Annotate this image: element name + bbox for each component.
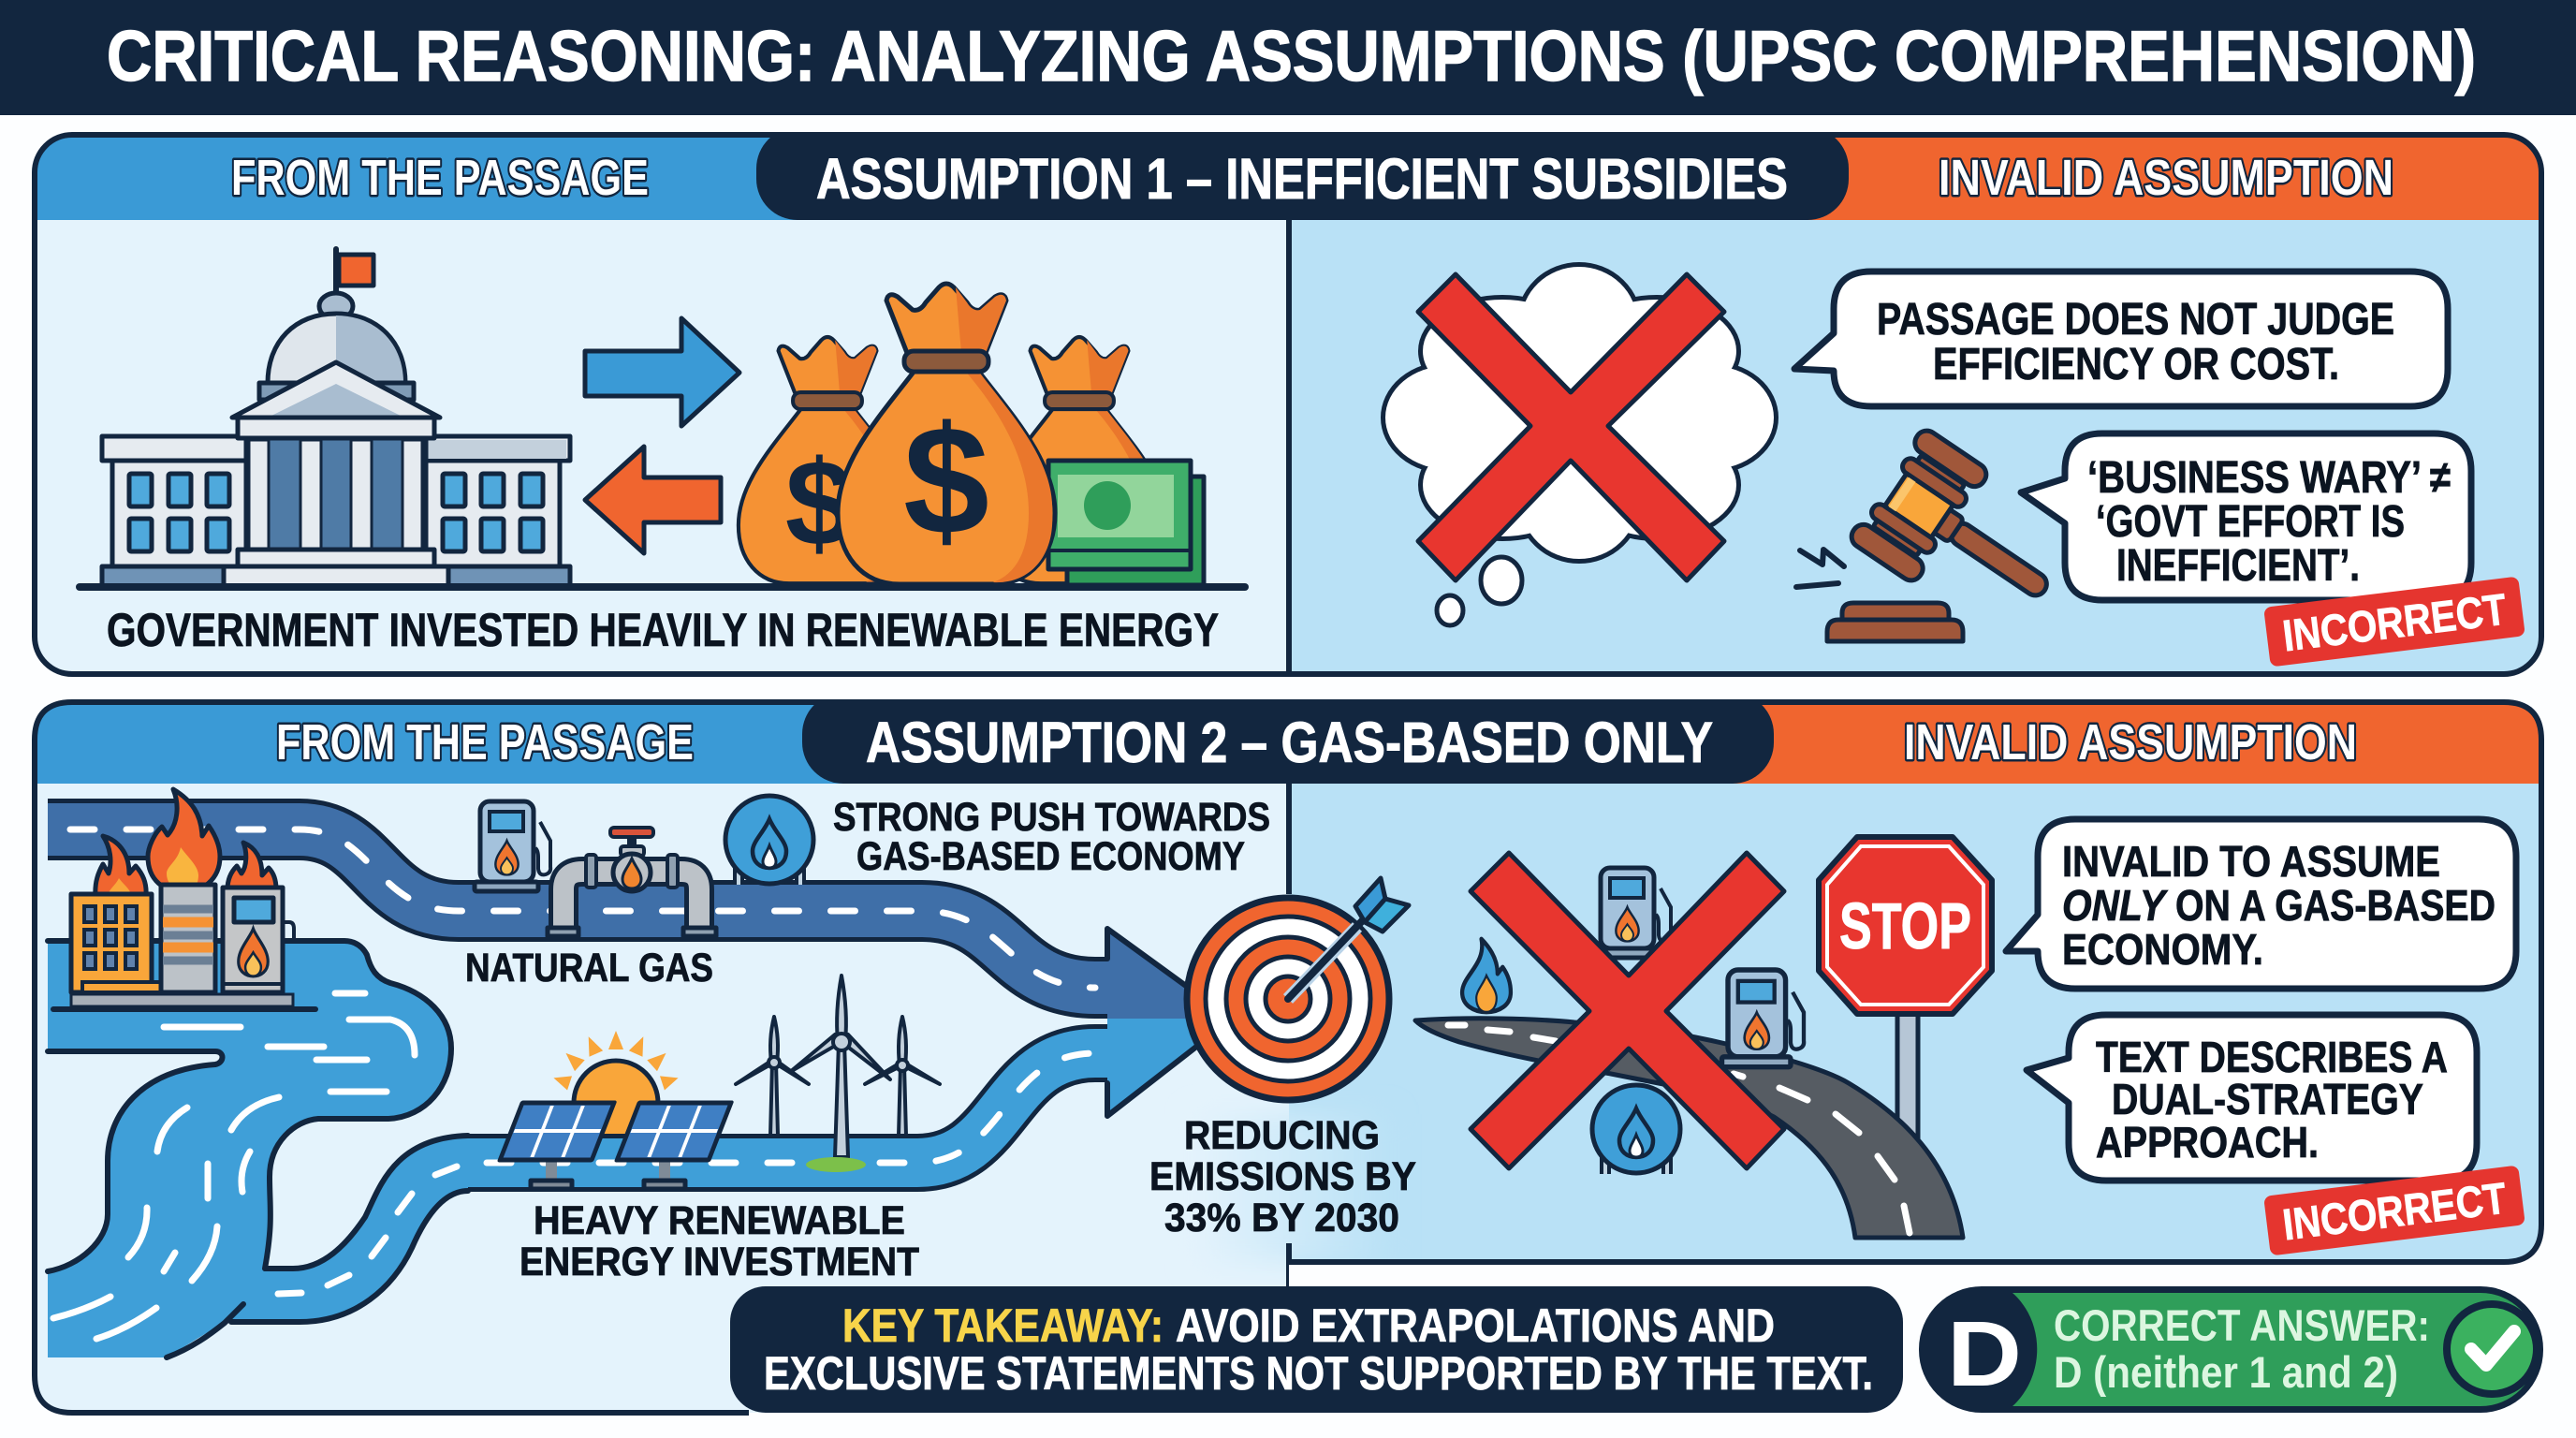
callout: dual strategy: TEXT DESCRIBES A — [2096, 1033, 2448, 1081]
icon: money bags and cash — [739, 284, 1204, 585]
label: heavy renewable: ENERGY INVESTMENT — [520, 1240, 919, 1284]
icon: gavel — [1796, 426, 2083, 647]
icon: stop sign post — [1897, 1011, 1918, 1152]
label: natural gas: NATURAL GAS — [465, 946, 713, 990]
label: reducing emissions: EMISSIONS BY — [1149, 1154, 1416, 1199]
callout: business wary — [2021, 433, 2471, 600]
road: natural gas route — [48, 829, 1119, 988]
icon: solar panels — [500, 1103, 731, 1189]
answer text: CORRECT ANSWER: — [2054, 1300, 2430, 1350]
heading: assumption 2: ASSUMPTION 2 – GAS-BASED ONLY — [866, 711, 1713, 774]
icon: money bags and cash: $ — [903, 394, 989, 566]
panel: assumption 1 — [35, 127, 2541, 674]
callout: invalid to assume: INVALID TO ASSUME — [2062, 837, 2440, 886]
heading: assumption 1: ASSUMPTION 1 – INEFFICIENT SUBSIDIES — [816, 147, 1788, 211]
label: strong push: STRONG PUSH TOWARDS — [833, 795, 1270, 840]
label: heavy renewable: HEAVY RENEWABLE — [534, 1198, 905, 1243]
icon: check mark — [2447, 1304, 2537, 1394]
callout: invalid to assume — [2006, 819, 2516, 989]
badge: incorrect: INCORRECT — [2280, 584, 2510, 660]
title — [0, 0, 2576, 115]
heading: from the passage: FROM THE PASSAGE — [276, 714, 694, 770]
heading: invalid assumption: INVALID ASSUMPTION — [1939, 150, 2393, 206]
answer text — [2054, 1300, 2430, 1397]
icon: money bags and cash: $ — [785, 434, 853, 571]
arrow: investment to money — [585, 318, 739, 426]
callout: invalid to assume: ON A GAS-BASED — [2175, 881, 2496, 930]
correct answer — [1919, 1286, 2543, 1413]
icon: blue flame — [1462, 939, 1511, 1012]
icon: government building — [102, 249, 570, 587]
icon: fuel pump — [475, 801, 550, 891]
icon: red cross — [1471, 853, 1784, 1168]
callout: passage does not judge: EFFICIENCY OR COST. — [1933, 340, 2339, 389]
key takeaway: EXCLUSIVE STATEMENTS NOT SUPPORTED BY THE TEXT. — [764, 1347, 1873, 1400]
caption: government invested: GOVERNMENT INVESTED HEAVILY IN RENEWABLE ENERGY — [107, 604, 1219, 656]
icon: stop sign — [1819, 837, 1992, 1014]
callout: business wary: ‘GOVT EFFORT IS — [2096, 497, 2405, 547]
heading: from the passage: FROM THE PASSAGE — [231, 150, 649, 206]
key takeaway — [730, 1286, 1903, 1413]
ground line — [80, 583, 1245, 591]
icon: gas tank — [725, 796, 813, 885]
arrow: merged arrowhead — [1107, 929, 1231, 1116]
callout: business wary: INEFFICIENT’. — [2116, 541, 2360, 591]
callout: business wary: ‘BUSINESS WARY’ ≠ — [2087, 453, 2451, 503]
panel: assumption 2 — [35, 693, 2541, 1414]
callout: passage does not judge — [1794, 271, 2448, 406]
callout: dual strategy — [2027, 1015, 2477, 1181]
badge: incorrect: INCORRECT — [2280, 1173, 2510, 1249]
icon: gas pipe and valve — [548, 828, 716, 936]
answer text: D (neither 1 and 2) — [2054, 1347, 2398, 1397]
label: strong push: GAS-BASED ECONOMY — [856, 834, 1245, 879]
heading: invalid assumption: INVALID ASSUMPTION — [1904, 714, 2357, 770]
icon: sun — [551, 1031, 681, 1145]
icon: crossed thought cloud — [1385, 267, 1774, 625]
icon: target — [1187, 878, 1409, 1100]
callout: dual strategy: DUAL-STRATEGY — [2112, 1075, 2423, 1123]
arrow: money back to government — [585, 447, 721, 553]
icon: crossed gas road — [1415, 853, 1963, 1238]
callout: dual strategy: APPROACH. — [2096, 1118, 2319, 1167]
label: reducing emissions: REDUCING — [1184, 1113, 1380, 1158]
road: river source — [48, 941, 468, 1357]
icon: stop sign: STOP — [1839, 889, 1971, 962]
icon: burning industry — [53, 789, 315, 1009]
label: strong push — [833, 795, 1270, 879]
icon: red cross — [1418, 274, 1724, 580]
label: heavy renewable — [520, 1198, 919, 1284]
answer letter: D — [1947, 1302, 2022, 1405]
label: reducing emissions — [1149, 1113, 1416, 1240]
icon: wind turbines — [736, 976, 940, 1172]
callout: invalid to assume: ECONOMY. — [2062, 925, 2263, 974]
road: renewable route — [459, 1053, 1119, 1163]
label: reducing emissions: 33% BY 2030 — [1164, 1196, 1399, 1240]
key takeaway: KEY TAKEAWAY: — [842, 1299, 1164, 1352]
key takeaway: AVOID EXTRAPOLATIONS AND — [1176, 1299, 1775, 1352]
callout: passage does not judge: PASSAGE DOES NOT JUDGE — [1877, 295, 2394, 345]
callout: invalid to assume: ONLY — [2062, 881, 2169, 930]
